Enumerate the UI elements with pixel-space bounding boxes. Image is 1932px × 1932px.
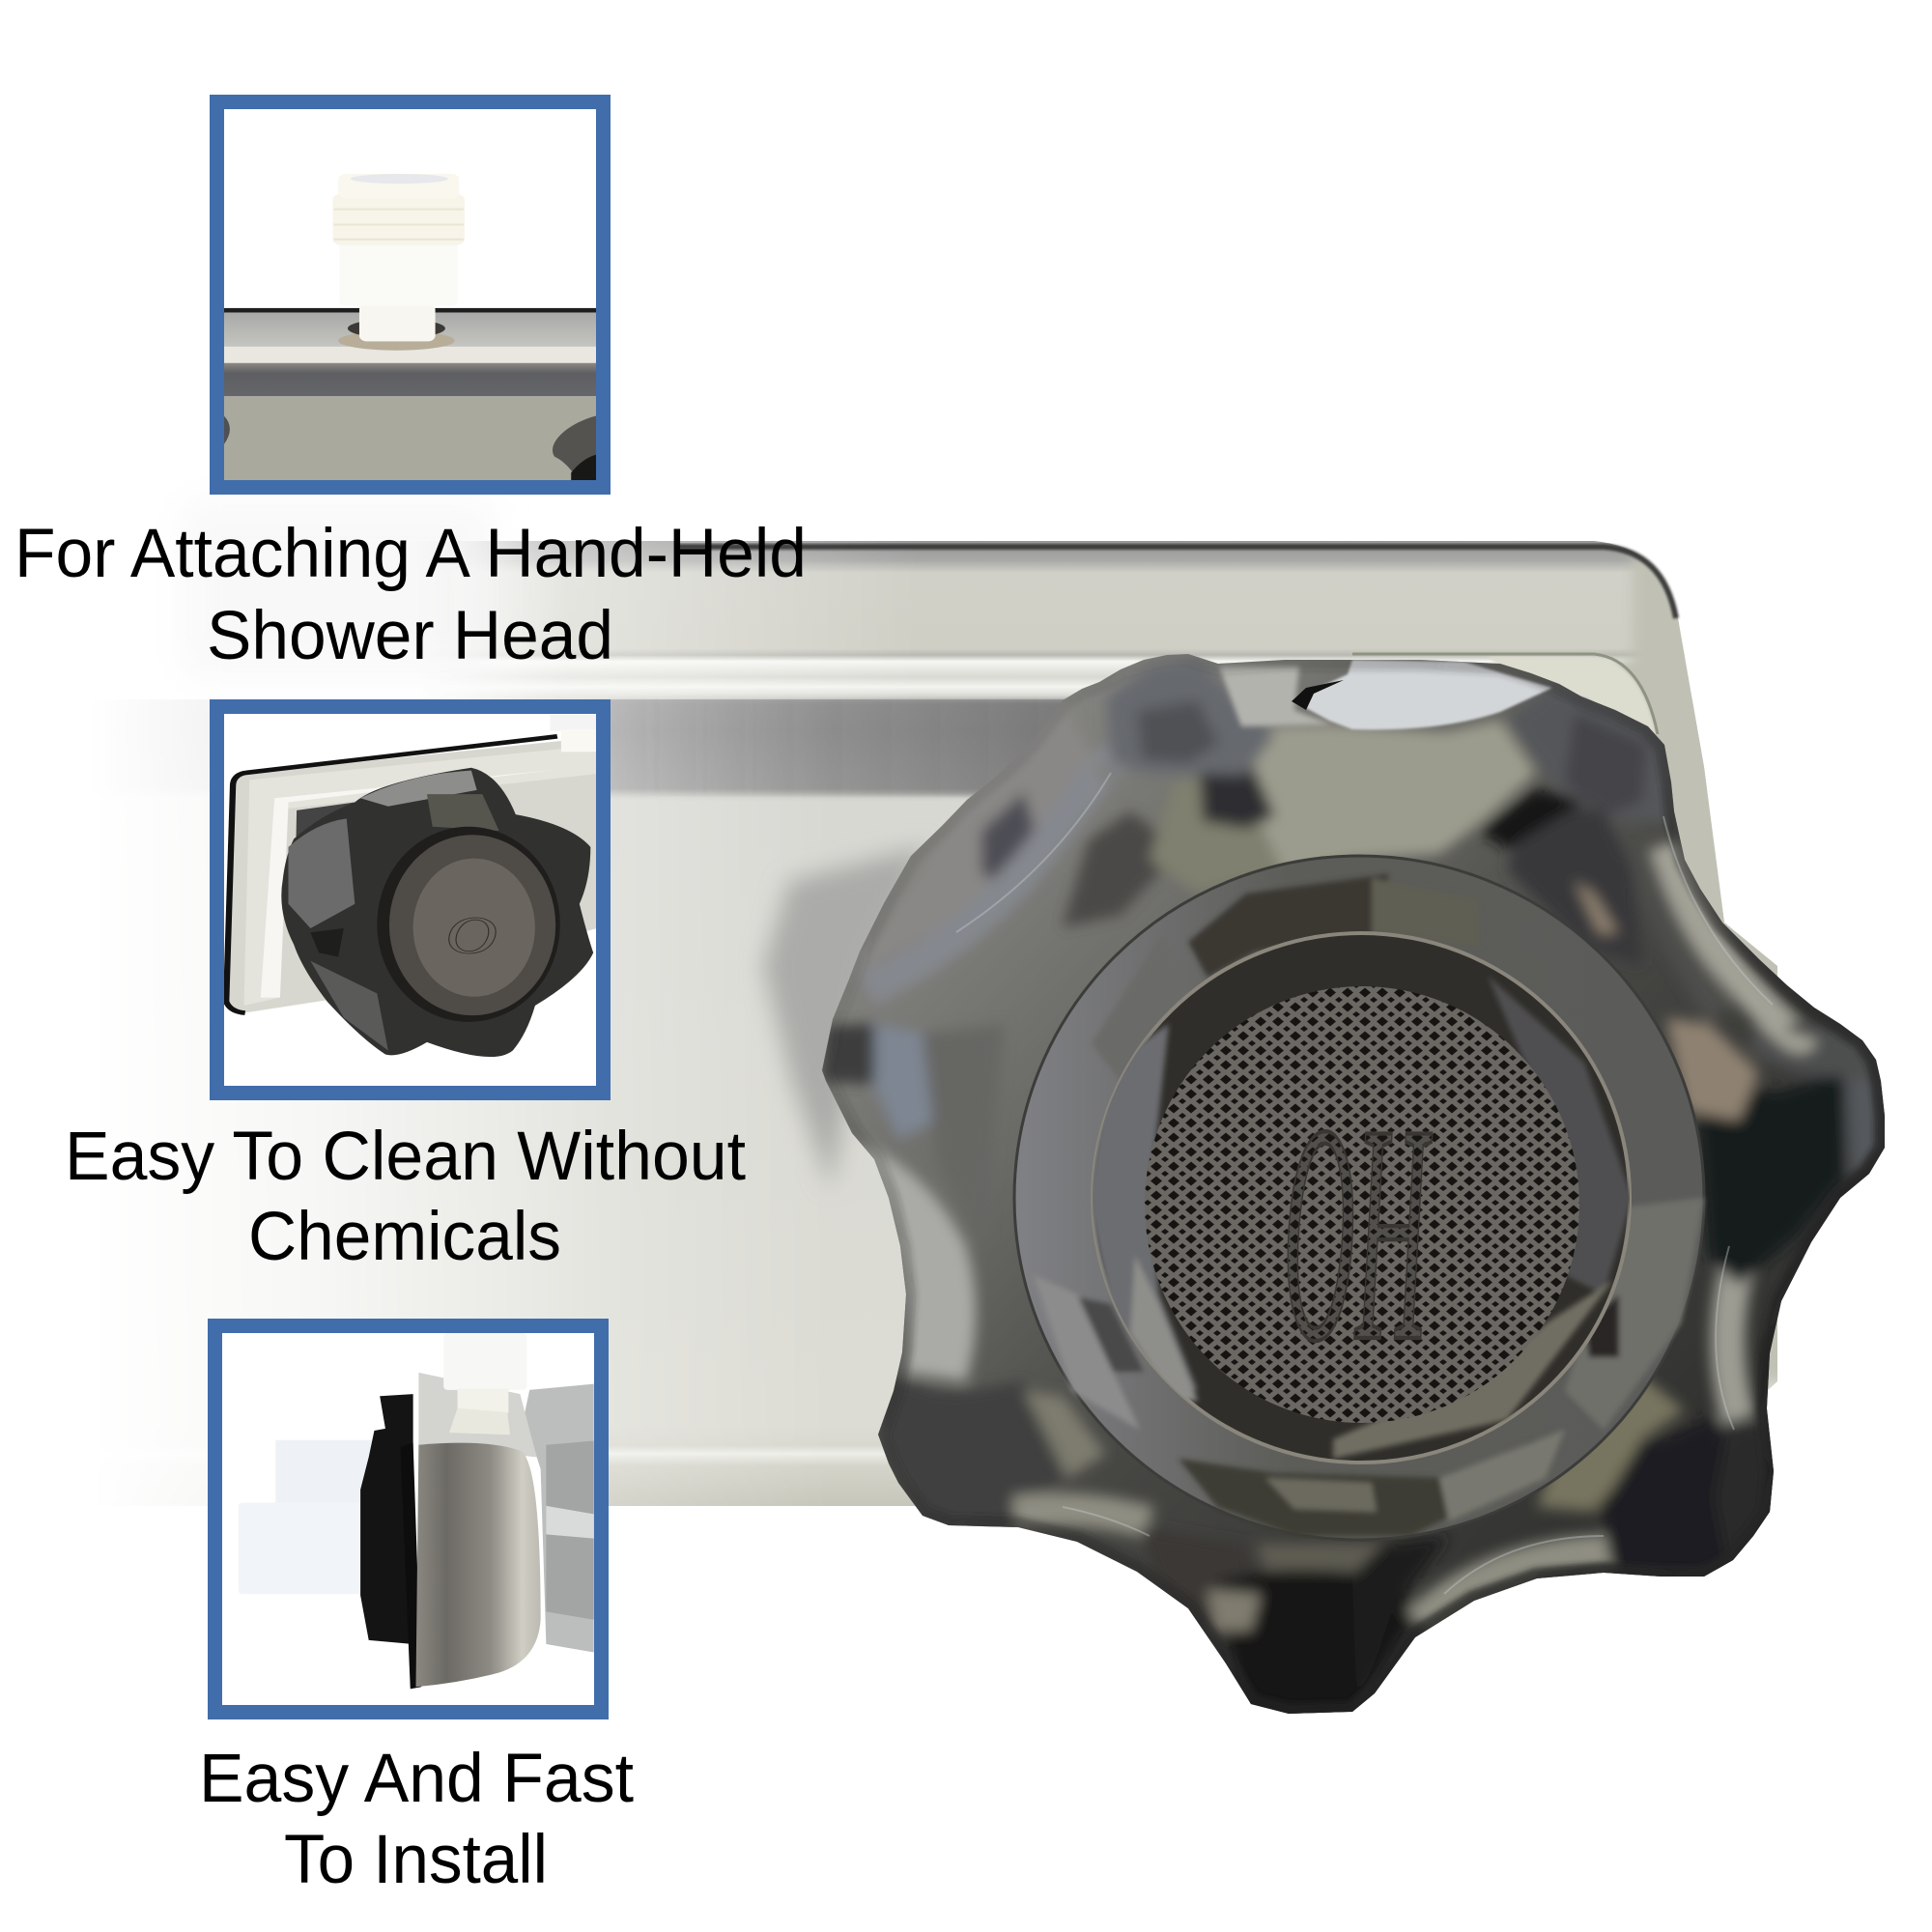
icon: white outlet [443,1333,526,1390]
icon: small knob [281,768,593,1057]
icon: white stem [550,715,597,731]
panel: easy install thumbnail [208,1319,609,1719]
left lobe [855,1140,976,1381]
upper left translucent lobe [871,722,1086,957]
knob thin highlights [956,773,1773,1594]
right lobe [1728,1246,1744,1420]
notch lobes [1107,659,1275,775]
caption: easy to clean [65,1119,746,1275]
icon: black mounting flange [360,1394,413,1644]
knob shadow on plate [763,845,927,1188]
caption: hand-held shower head: For Attaching A Hand-Held [14,516,807,592]
icon: faceplate top edge [224,308,597,313]
plate top edge line [676,547,1676,618]
upper right arc [1642,850,1719,1014]
icon: brushed plate side [418,1373,537,1457]
knob body and lobes [811,647,1893,1719]
left tip [821,1024,874,1084]
caption: hand-held shower head [14,516,807,674]
caption: hand-held shower head: Shower Head [207,598,613,674]
knob rim shading [822,654,1885,1714]
panel: easy to clean thumbnail: O [445,907,497,965]
knob outer ring [1014,856,1704,1540]
icon: clear knob side [524,1384,594,1652]
icon: rear threaded connectors [275,1440,376,1505]
knob mesh grille [1145,986,1579,1423]
caption: easy to clean: Easy To Clean Without [65,1119,746,1195]
right black reflection [1695,1072,1844,1285]
icon: white threaded fitting [338,330,455,351]
panel: easy to clean thumbnail [210,699,611,1100]
top lobe highlight [1292,660,1552,729]
plate right side shoulder [1605,558,1777,1385]
panel: hand-held shower head thumbnail [210,95,611,495]
faded valve faceplate background [87,502,1797,1506]
dark notch [1478,787,1584,850]
icon: faceplate angled [228,737,597,1013]
bottom tip [1212,1570,1420,1719]
caption: easy install: Easy And Fast [199,1741,634,1817]
top olive band [1227,720,1536,874]
caption: easy install [199,1741,634,1898]
lower right lobe [1420,1553,1611,1625]
lower lobe light [1014,1510,1150,1522]
caption: easy install: To Install [284,1822,548,1898]
lower left dark [878,1375,1056,1527]
caption: easy to clean: Chemicals [248,1199,561,1275]
knob logo: OH [1283,1062,1434,1406]
large smoked shower knob [811,647,1893,1719]
knob inner dome [1087,933,1633,1463]
faint ghost of fitting [184,502,493,676]
